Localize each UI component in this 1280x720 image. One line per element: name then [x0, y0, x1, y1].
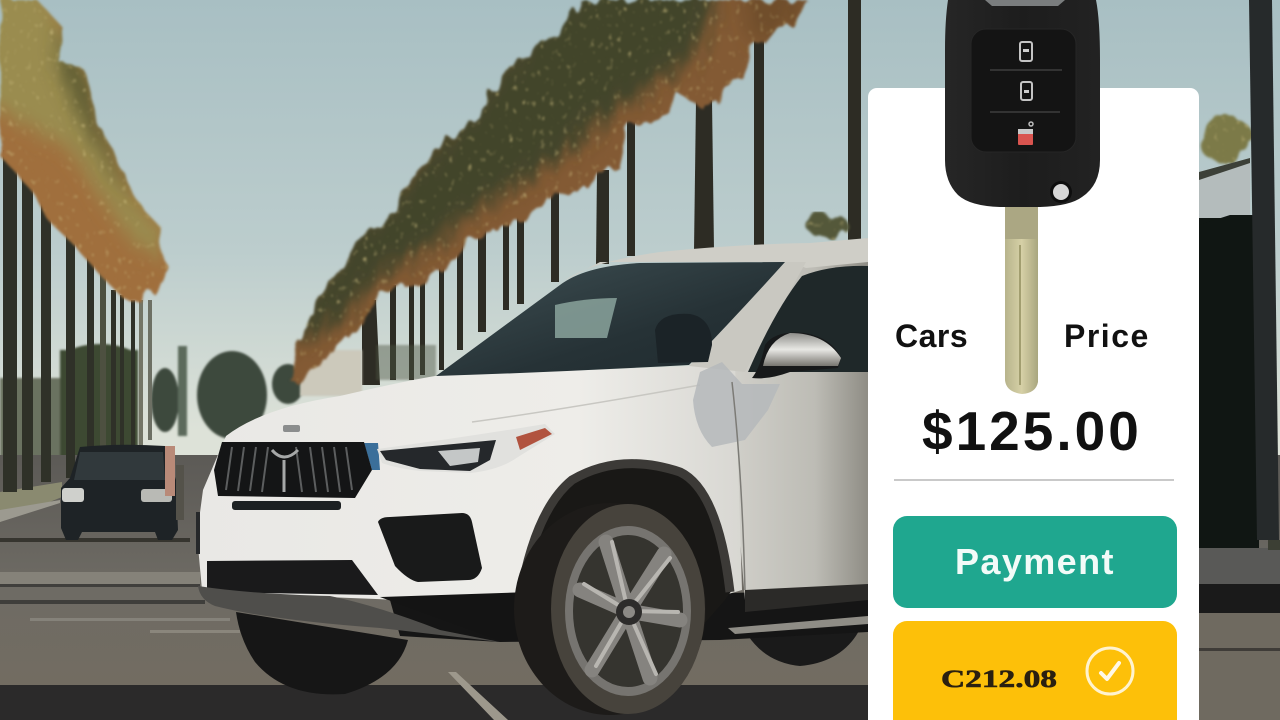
- roof: [564, 238, 868, 281]
- A-pillar: [689, 262, 806, 372]
- label: Cars: Cars: [895, 318, 968, 354]
- palm row: right: [280, 0, 861, 396]
- button: yellow confirmation: C212.08: [941, 666, 1057, 693]
- panel: price card: [868, 88, 1199, 720]
- button: Payment: Payment: [955, 541, 1115, 582]
- button icon: unlock: [1021, 82, 1032, 100]
- front wheel: [514, 503, 706, 715]
- button icon: panic red: [1018, 122, 1033, 145]
- divider: [894, 479, 1174, 481]
- windshield reflection: [555, 298, 617, 338]
- hood badge: [283, 425, 300, 432]
- distant trees: [0, 344, 304, 485]
- hood crease: [472, 385, 700, 422]
- mirror shadow on door: [693, 362, 780, 447]
- door edge: [732, 382, 745, 590]
- wheel arch: [518, 462, 732, 640]
- side panels: [735, 238, 868, 600]
- label: Price: Price: [1064, 318, 1150, 354]
- lower intake: [207, 560, 378, 595]
- icon: check circle: [1087, 648, 1133, 694]
- side window: [748, 266, 868, 372]
- release button: [1050, 181, 1072, 203]
- grille: [214, 442, 380, 498]
- side mirror: [752, 332, 841, 378]
- fog lamp grille: [378, 513, 482, 582]
- far front wheel: [236, 612, 408, 694]
- key fob: [945, 0, 1100, 207]
- road: [0, 455, 1280, 720]
- rear wheel: [742, 625, 862, 666]
- button panel: [971, 29, 1076, 152]
- key blade: [1005, 207, 1038, 394]
- door rocker: [745, 584, 868, 612]
- button icon: lock: [1020, 42, 1032, 61]
- button: yellow confirmation: [893, 621, 1177, 720]
- scenery right of card: [1199, 0, 1280, 720]
- front white body: [197, 362, 742, 640]
- icon: car key: [945, 0, 1100, 394]
- SUV: [196, 238, 868, 715]
- bumper left edge: [196, 512, 200, 554]
- distant dark car: [61, 445, 184, 540]
- headlight: [377, 424, 555, 473]
- windshield: [436, 262, 785, 376]
- grille slot: [232, 501, 341, 510]
- bumper skirt: [198, 586, 500, 642]
- under body: [390, 590, 868, 642]
- button: Payment: [893, 516, 1177, 608]
- price amount: $125.00: [922, 400, 1142, 462]
- palm row: left: [0, 0, 170, 492]
- seat: [655, 314, 712, 363]
